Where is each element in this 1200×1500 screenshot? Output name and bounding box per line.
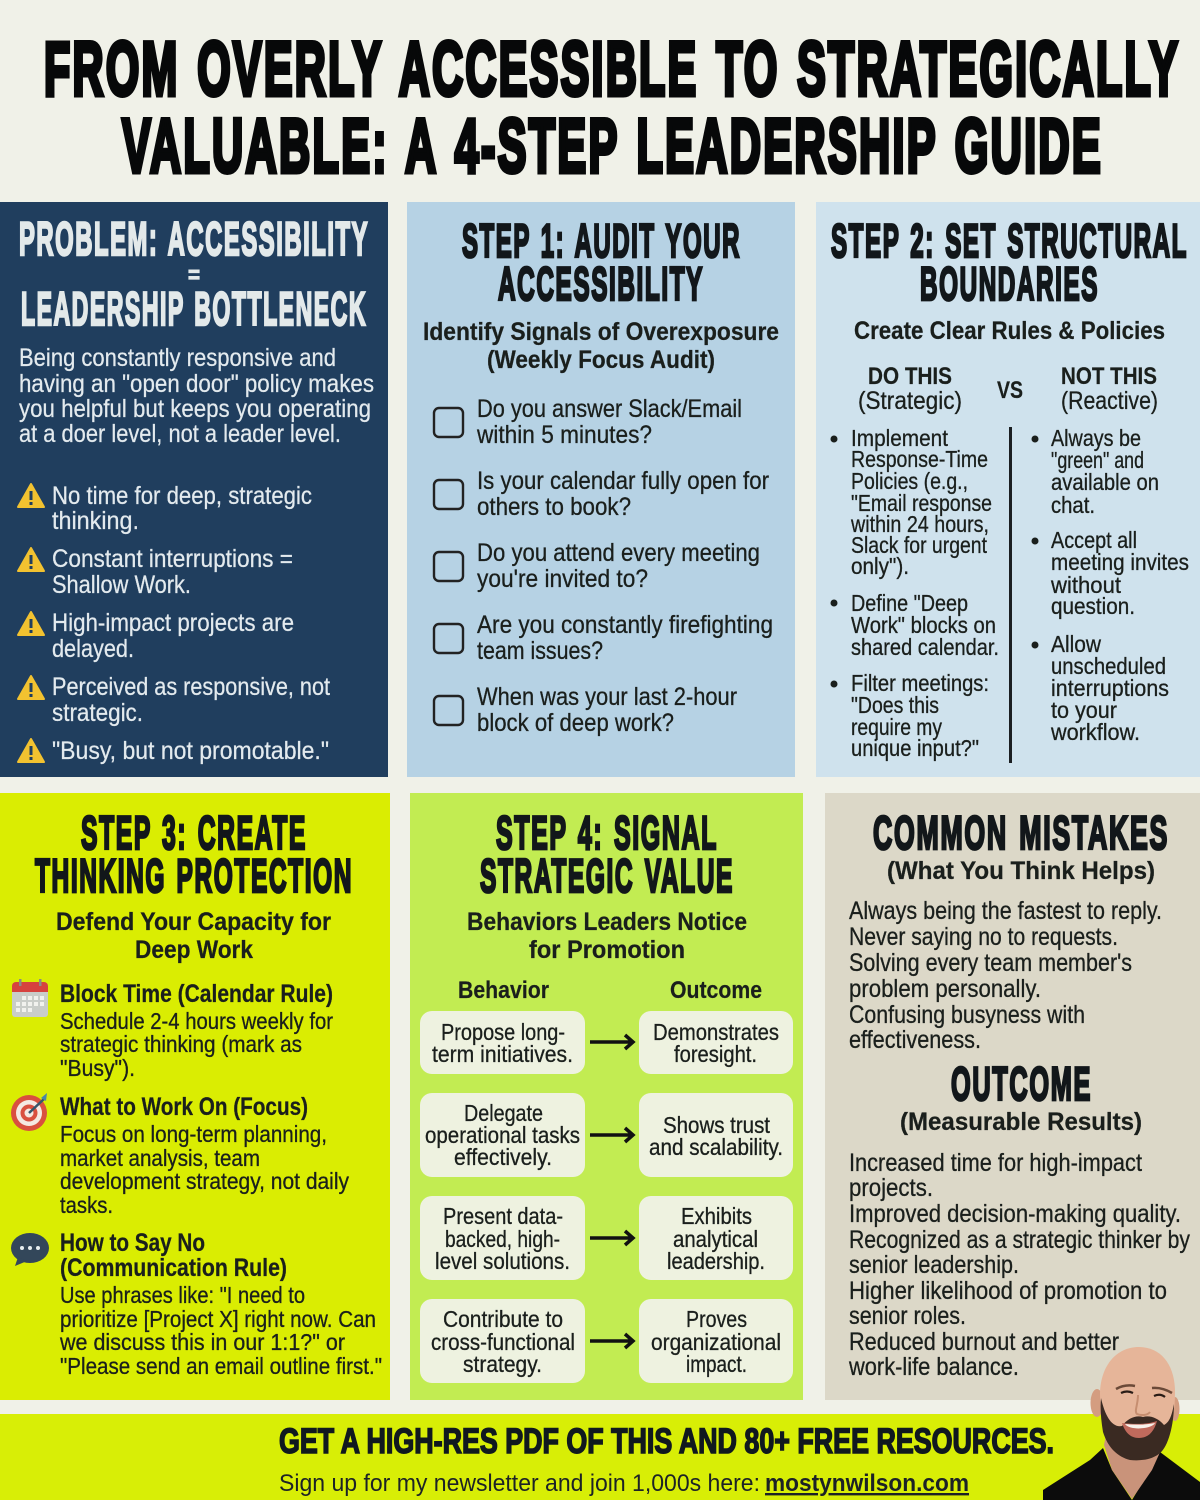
panel: common mistakes and outcome <box>825 793 1200 1400</box>
eyebrows <box>1116 1385 1172 1393</box>
item: say no: prioritize [Project X] right now. Can <box>60 1306 376 1332</box>
checklist item 3: you're invited to? <box>477 565 648 593</box>
text block: outcomes: senior roles. <box>849 1302 966 1330</box>
text block: outcomes: Reduced burnout and better <box>849 1328 1119 1356</box>
list: reactive: to your <box>1051 697 1117 723</box>
text block: problem description: Being constantly responsive and <box>19 344 336 372</box>
item: focus: tasks. <box>60 1192 113 1218</box>
row 4: behavior to outcome: Contribute to <box>443 1306 563 1332</box>
list: reactive: Always be <box>1051 425 1141 451</box>
row 3: behavior to outcome: level solutions. <box>435 1248 570 1274</box>
checklist item 3 <box>434 539 760 593</box>
item: block time: strategic thinking (mark as <box>60 1031 302 1057</box>
item: say no <box>59 1229 382 1379</box>
neck <box>1104 1435 1161 1499</box>
heading: problem: PROBLEM: ACCESSIBILITY <box>19 212 369 265</box>
text block: mistakes <box>849 897 1162 1054</box>
row 3: behavior to outcome: backed, high- <box>445 1226 560 1252</box>
text block: mistakes: Solving every team member's <box>849 949 1132 977</box>
column header: do this <box>858 363 962 415</box>
list: reactive: "green" and <box>1051 447 1144 473</box>
text block: problem description <box>19 344 374 448</box>
list: reactive: interruptions <box>1051 675 1169 701</box>
beard <box>1101 1398 1174 1460</box>
list: reactive: meeting invites <box>1051 549 1189 575</box>
text block: mistakes: Never saying no to requests. <box>849 923 1118 951</box>
checklist item 5 <box>434 683 737 737</box>
warning item 3: delayed. <box>52 635 134 663</box>
checklist item 1: Do you answer Slack/Email <box>477 395 742 423</box>
row 2: behavior to outcome: Shows trust <box>663 1112 771 1138</box>
item: focus: Focus on long-term planning, <box>60 1121 327 1147</box>
list: strategic: Work" blocks on <box>851 612 996 638</box>
title <box>44 27 1180 189</box>
warning item 3 <box>18 609 294 663</box>
mouth <box>1122 1421 1157 1438</box>
text block: mistakes: problem personally. <box>849 975 1041 1003</box>
list: strategic: only"). <box>851 553 909 579</box>
heading: problem <box>19 212 369 335</box>
heading: common mistakes: (What You Think Helps) <box>887 857 1155 885</box>
row 2: behavior to outcome: effectively. <box>454 1144 552 1170</box>
list: strategic: Filter meetings: <box>851 670 989 696</box>
column header: not this: NOT THIS <box>1061 363 1157 390</box>
head <box>1100 1347 1175 1460</box>
subheading: step 3 <box>56 908 331 964</box>
column header: do this: DO THIS <box>868 363 952 390</box>
checklist item 2 <box>434 467 769 521</box>
column header: not this: (Reactive) <box>1061 387 1158 415</box>
row 1: behavior to outcome: Propose long- <box>441 1019 565 1045</box>
text block: outcomes: work-life balance. <box>848 1353 1019 1381</box>
list: reactive: unscheduled <box>1051 653 1166 679</box>
list: strategic: Response-Time <box>851 446 988 472</box>
column headers: Behavior <box>458 977 549 1004</box>
eyes <box>1121 1392 1165 1397</box>
row 1: behavior to outcome: foresight. <box>674 1041 757 1067</box>
heading: outcome <box>900 1057 1142 1136</box>
row 4: behavior to outcome: organizational <box>651 1329 781 1355</box>
row 2: behavior to outcome: operational tasks <box>425 1122 580 1148</box>
list: reactive: available on <box>1051 469 1159 495</box>
row 4: behavior to outcome: strategy. <box>463 1351 542 1377</box>
checklist item 4: Are you constantly firefighting <box>477 611 773 639</box>
panel: step 4 <box>410 793 803 1400</box>
icon: calendar <box>12 979 48 1017</box>
portrait <box>1043 1347 1200 1500</box>
text block: outcomes: senior leadership. <box>849 1251 1019 1279</box>
subheading: step 2: Create Clear Rules & Policies <box>854 317 1165 345</box>
list: reactive: question. <box>1051 593 1135 619</box>
text block: outcomes: projects. <box>849 1174 933 1202</box>
text block: problem description: having an "open door" policy makes <box>19 370 374 398</box>
row 4: behavior to outcome: impact. <box>686 1351 747 1377</box>
checklist item 1 <box>434 395 742 449</box>
row 2: behavior to outcome: Delegate <box>464 1100 543 1126</box>
row 4: behavior to outcome: Proves <box>686 1306 747 1332</box>
list: reactive: Allow <box>1051 631 1101 657</box>
row 3: behavior to outcome: Present data- <box>443 1203 563 1229</box>
heading: step 1 <box>462 214 741 310</box>
footer band <box>0 1414 1200 1500</box>
warning item 1: thinking. <box>52 507 139 535</box>
row 3: behavior to outcome: leadership. <box>667 1248 765 1274</box>
checklist item 4: team issues? <box>477 637 603 665</box>
item: block time: "Busy"). <box>60 1055 135 1081</box>
row 2: behavior to outcome: and scalability. <box>649 1134 783 1160</box>
list: strategic: Policies (e.g., <box>851 468 968 494</box>
list: strategic: within 24 hours, <box>850 511 989 537</box>
panel: step 3 <box>0 793 390 1400</box>
list: reactive: workflow. <box>1050 719 1140 745</box>
list: strategic: shared calendar. <box>851 634 999 660</box>
list: strategic: Implement <box>851 425 949 451</box>
list: strategic: Define "Deep <box>851 590 968 616</box>
heading: problem: = <box>188 262 200 289</box>
nose <box>1136 1395 1150 1415</box>
column header: do this: (Strategic) <box>858 387 962 415</box>
subheading: step 1: Identify Signals of Overexposure <box>423 318 779 346</box>
text block: outcomes: Increased time for high-impact <box>849 1149 1142 1177</box>
heading: step 1: STEP 1: AUDIT YOUR <box>462 214 741 267</box>
warning item 1 <box>18 482 312 535</box>
icon: speech bubble <box>11 1233 49 1266</box>
warning item 4: strategic. <box>52 699 143 727</box>
shirt <box>1043 1448 1200 1500</box>
checklist item 5: When was your last 2-hour <box>477 683 737 711</box>
subheading: step 3: Deep Work <box>135 936 253 964</box>
list: strategic: unique input?" <box>851 735 979 761</box>
heading: step 4: STEP 4: SIGNAL <box>496 806 718 859</box>
item: say no: Use phrases like: "I need to <box>60 1282 305 1308</box>
vs label: VS <box>997 377 1023 404</box>
warning item 1: No time for deep, strategic <box>52 482 312 510</box>
text block: outcomes: Higher likelihood of promotion to <box>849 1277 1167 1305</box>
text block: mistakes: Confusing busyness with <box>849 1001 1085 1029</box>
item: block time <box>60 980 333 1081</box>
item: say no: we discuss this in our 1:1?" or <box>59 1329 345 1355</box>
newsletter line: mostynwilson.com <box>765 1470 969 1497</box>
panel: step 2 <box>816 202 1200 777</box>
item: focus <box>60 1093 349 1218</box>
warning item 3: High-impact projects are <box>52 609 294 637</box>
row 1: behavior to outcome: Demonstrates <box>653 1019 779 1045</box>
list: strategic <box>830 425 999 761</box>
list: reactive: Accept all <box>1051 527 1137 553</box>
text block: problem description: you helpful but keeps you operating <box>19 395 371 423</box>
heading: common mistakes <box>873 806 1169 885</box>
checklist item 5: block of deep work? <box>477 709 674 737</box>
subheading: step 1: (Weekly Focus Audit) <box>487 346 715 374</box>
checklist item 4 <box>434 611 773 665</box>
checklist item 2: Is your calendar fully open for <box>477 467 769 495</box>
subheading: step 4: Behaviors Leaders Notice <box>467 908 747 936</box>
item: block time: Block Time (Calendar Rule) <box>60 980 333 1008</box>
list: strategic: "Does this <box>851 692 939 718</box>
row 3: behavior to outcome: Exhibits <box>681 1203 752 1229</box>
row 1: behavior to outcome: term initiatives. <box>432 1041 573 1067</box>
item: say no: How to Say No <box>60 1229 205 1257</box>
subheading: step 1 <box>423 318 779 374</box>
column headers <box>458 977 762 1004</box>
row 4: behavior to outcome <box>420 1299 793 1383</box>
row 3: behavior to outcome: analytical <box>673 1226 758 1252</box>
list: reactive <box>1032 425 1189 745</box>
text block: mistakes: effectiveness. <box>849 1026 981 1054</box>
item: say no: (Communication Rule) <box>60 1254 287 1282</box>
subheading: step 4: for Promotion <box>529 936 685 964</box>
list: reactive: chat. <box>1051 492 1095 518</box>
text block: outcomes <box>848 1149 1190 1381</box>
text block: problem description: at a doer level, not a leader level. <box>19 420 341 448</box>
list: strategic: "Email response <box>851 490 992 516</box>
heading: outcome: (Measurable Results) <box>900 1108 1142 1136</box>
heading: step 3: THINKING PROTECTION <box>35 849 353 902</box>
panel: problem <box>0 202 388 777</box>
item: say no: "Please send an email outline first." <box>60 1353 382 1379</box>
subheading: step 4 <box>467 908 747 964</box>
warning item 2: Constant interruptions = <box>52 545 293 573</box>
warning item 4 <box>18 673 330 727</box>
warning item 2 <box>18 545 293 599</box>
icon: target <box>11 1093 47 1131</box>
item: focus: market analysis, team <box>60 1145 260 1171</box>
heading: step 1: ACCESSIBILITY <box>498 257 704 310</box>
list: strategic: Slack for urgent <box>851 532 988 558</box>
heading: step 3: STEP 3: CREATE <box>81 806 307 859</box>
heading: step 2 <box>831 214 1188 310</box>
row 1: behavior to outcome <box>420 1011 793 1074</box>
warning item 2: Shallow Work. <box>52 571 191 599</box>
item: focus: development strategy, not daily <box>60 1168 349 1194</box>
checklist item 2: others to book? <box>477 493 631 521</box>
checklist item 1: within 5 minutes? <box>476 421 652 449</box>
heading: step 4 <box>480 806 734 902</box>
panel: problem: LEADERSHIP BOTTLENECK <box>21 282 367 335</box>
list: strategic: require my <box>851 714 942 740</box>
column header: not this <box>1061 363 1158 415</box>
panel: step 1 <box>407 202 795 777</box>
item: focus: What to Work On (Focus) <box>60 1093 308 1121</box>
heading: step 3 <box>35 806 353 902</box>
row 2: behavior to outcome <box>420 1093 793 1177</box>
warning item 5: "Busy, but not promotable." <box>52 737 329 765</box>
list: reactive: without <box>1050 572 1122 598</box>
checklist item 3: Do you attend every meeting <box>477 539 760 567</box>
item: block time: Schedule 2-4 hours weekly for <box>60 1008 333 1034</box>
row 4: behavior to outcome: cross-functional <box>431 1329 575 1355</box>
column headers: Outcome <box>670 977 762 1004</box>
ears <box>1090 1389 1180 1421</box>
newsletter line: Sign up for my newsletter and join 1,000s here: <box>279 1470 760 1497</box>
heading: step 4: STRATEGIC VALUE <box>480 849 734 902</box>
warning item 4: Perceived as responsive, not <box>52 673 330 701</box>
row 3: behavior to outcome <box>420 1196 793 1280</box>
subheading: step 3: Defend Your Capacity for <box>56 908 331 936</box>
